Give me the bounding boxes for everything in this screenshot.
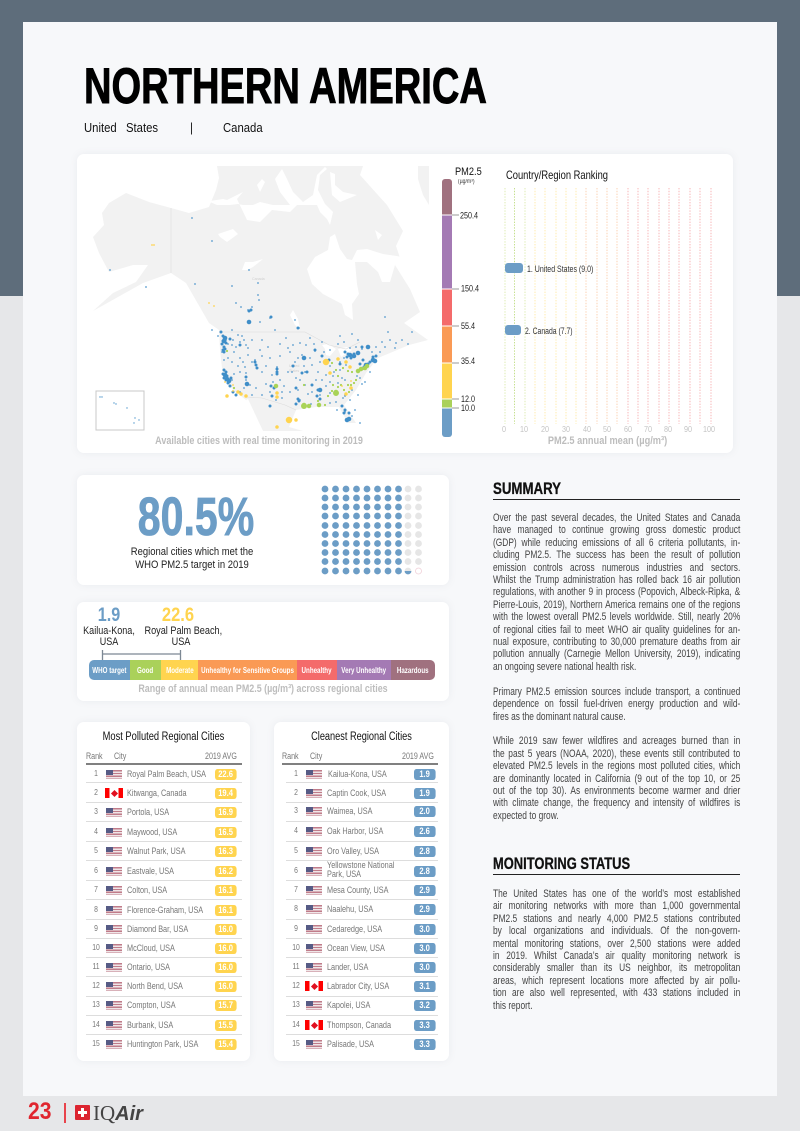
text: Walnut Park, USA xyxy=(127,846,185,856)
waffle chart xyxy=(322,486,422,574)
footer divider xyxy=(64,1103,66,1123)
text: 13 xyxy=(292,1000,300,1009)
axis labels: 20 xyxy=(541,424,549,434)
text: 7 xyxy=(94,885,98,894)
text: 16.3 xyxy=(218,846,233,857)
text: Palisade, USA xyxy=(327,1039,374,1049)
text: Ocean View, USA xyxy=(327,943,385,953)
text: Kailua-Kona, USA xyxy=(328,769,387,779)
text: 14 xyxy=(92,1020,100,1029)
text: summary: an ongoing severe national health risk. xyxy=(493,661,636,673)
map labels: United xyxy=(289,364,299,368)
text: 3.0 xyxy=(419,962,430,973)
axis labels xyxy=(502,424,715,434)
legend: PM2.5 scale: 55.4 xyxy=(461,321,475,331)
title: NORTHERN AMERICA xyxy=(84,58,487,114)
text: 8 xyxy=(294,904,298,913)
text: summary xyxy=(493,512,740,822)
text: 2 xyxy=(294,788,298,797)
chart: country ranking xyxy=(502,188,715,434)
text: Rank xyxy=(282,751,299,761)
min city xyxy=(83,625,135,648)
text: Lander, USA xyxy=(327,962,368,972)
text: summary: Over the past several decades, the United States and Canada xyxy=(493,512,740,524)
text: 1 xyxy=(94,769,98,778)
text: 16.0 xyxy=(218,924,233,935)
text: 11 xyxy=(292,962,300,971)
axis labels: 30 xyxy=(562,424,570,434)
text: monitoring status: by local organizations and individuals. Of the non-govern- xyxy=(493,925,740,937)
text: summary: pollution annually (Carnegie Mellon University, 2019), indicating xyxy=(493,648,740,660)
text: Ontario, USA xyxy=(127,962,170,972)
text: 10 xyxy=(92,943,100,952)
legend: PM2.5 scale: 150.4 xyxy=(461,284,479,294)
text: 16.1 xyxy=(218,885,233,896)
text: summary: cluding PM2.5. The success has been the result of pollution xyxy=(493,549,740,561)
text: 3.0 xyxy=(419,924,430,935)
text: 16.2 xyxy=(218,866,233,877)
text: 13 xyxy=(92,1000,100,1009)
text: monitoring status: PM2.5 stations and nearly 4,000 PM2.5 stations contributed xyxy=(493,913,740,925)
text: Compton, USA xyxy=(127,1000,176,1010)
page number: 23 xyxy=(28,1098,51,1125)
text: summary: While 2019 saw fewer wildfires and acreages burned than in xyxy=(493,735,740,747)
text: 1 xyxy=(294,769,298,778)
text: Waimea, USA xyxy=(327,806,373,816)
heading: summary: SUMMARY xyxy=(493,479,561,498)
text: City xyxy=(310,751,322,761)
text: North Bend, USA xyxy=(127,981,183,991)
text: 3.0 xyxy=(419,943,430,954)
text: 1.9 xyxy=(419,788,430,799)
text: monitoring status: areas, which represent locations more affected by air pollu- xyxy=(493,975,740,987)
text: Yellowstone National xyxy=(327,860,394,870)
text: monitoring status xyxy=(493,888,740,1012)
text: monitoring status: The United States has one of the world’s most established xyxy=(493,888,740,900)
text: 2.9 xyxy=(419,904,430,915)
text: summary: have managed to continue growing gross domestic product xyxy=(493,524,740,536)
top band xyxy=(0,0,800,296)
text: summary: the past 5 years (NOAA, 2020), these events still contributed to xyxy=(493,748,740,760)
text: 8 xyxy=(94,905,98,914)
text: monitoring status: air monitoring networks with more than 1,000 governmental xyxy=(493,900,740,912)
text: 15 xyxy=(92,1039,100,1048)
heading: summary xyxy=(493,479,740,500)
AQI scale bar: Hazardous xyxy=(397,665,429,675)
text: 2.0 xyxy=(419,806,430,817)
text: 2.8 xyxy=(419,866,430,877)
text: 15.5 xyxy=(218,1020,233,1031)
legend: PM2.5 scale: 35.4 xyxy=(461,356,475,366)
text: Oak Harbor, USA xyxy=(327,826,383,836)
text: summary: regulations, with another 9 in process (Popovich, Albeck-Ripka, & xyxy=(493,586,740,598)
text: Royal Palm Beach, USA xyxy=(127,769,206,779)
legend: PM2.5 scale: 250.4 xyxy=(460,210,478,220)
text: Eastvale, USA xyxy=(127,866,174,876)
text: summary: dependence on fossil fuel-driven energy production and wild- xyxy=(493,698,740,710)
panel: map and ranking xyxy=(77,154,733,453)
text: Cleanest Regional Cities xyxy=(311,731,412,743)
legend: PM2.5 scale xyxy=(442,166,482,437)
AQI scale bar: WHO target xyxy=(92,665,127,675)
text: 3.3 xyxy=(419,1020,430,1031)
text: 2 xyxy=(94,788,98,797)
inset: Hawaii xyxy=(96,391,144,430)
text: 11 xyxy=(92,962,100,971)
axis labels: 90 xyxy=(684,424,692,434)
heading: monitoring status: MONITORING STATUS xyxy=(493,854,630,873)
text: 16.0 xyxy=(218,981,233,992)
text: 22.6 xyxy=(218,769,233,780)
text: 5 xyxy=(94,846,98,855)
text: 9 xyxy=(94,924,98,933)
axis labels: 10 xyxy=(520,424,528,434)
text: Diamond Bar, USA xyxy=(127,924,188,934)
text: summary: Pierre-Louis, 2019), Northern America remains one of the regions xyxy=(493,599,740,611)
text: McCloud, USA xyxy=(127,943,175,953)
text: 6 xyxy=(94,866,98,875)
text: 2019 AVG xyxy=(205,751,237,761)
big percentage: 80.5% xyxy=(138,487,254,547)
legend: PM2.5 scale: PM2.5 xyxy=(455,166,482,178)
heading: monitoring status xyxy=(493,854,740,875)
panel: cleanest cities xyxy=(274,722,449,1061)
text: 2.6 xyxy=(419,826,430,837)
text: 3.2 xyxy=(419,1000,430,1011)
axis labels: 60 xyxy=(624,424,632,434)
text: 3 xyxy=(294,806,298,815)
axis title: PM2.5 annual mean (µg/m³) xyxy=(548,435,667,447)
text: 16.0 xyxy=(218,943,233,954)
text: 12 xyxy=(92,981,100,990)
text: summary: emission controls across numerous industries and sectors. xyxy=(493,562,740,574)
min city: Kailua-Kona, xyxy=(83,625,135,637)
axis labels: 80 xyxy=(664,424,672,434)
axis labels: 50 xyxy=(603,424,611,434)
bar label: United States: 1. United States (9.0) xyxy=(527,264,593,274)
axis labels: 100 xyxy=(703,424,715,434)
map labels xyxy=(252,277,299,373)
text: summary: Whilst the Trump administration has rolled back 16 air pollution xyxy=(493,574,740,586)
AQI scale bar: Unhealthy xyxy=(302,665,332,675)
text: 19.4 xyxy=(218,788,233,799)
text: 3.3 xyxy=(419,1039,430,1050)
text: monitoring status: considerably smaller than its US neighbor, its metropolitan xyxy=(493,962,740,974)
logo: IQAir: IQAir xyxy=(93,1101,143,1125)
icon: swiss cross xyxy=(75,1105,90,1120)
country list: | xyxy=(190,120,193,135)
country list: United xyxy=(84,120,117,135)
text: 14 xyxy=(292,1020,300,1029)
country list: States xyxy=(126,120,158,135)
text: Captin Cook, USA xyxy=(327,788,386,798)
axis labels: 40 xyxy=(583,424,591,434)
panel: WHO target share xyxy=(77,475,449,585)
map caption: Available cities with real time monitoring in 2019 xyxy=(155,435,363,447)
text: 9 xyxy=(294,924,298,933)
AQI scale bar: Unhealthy for Sensitive Groups xyxy=(201,665,294,675)
text: Florence-Graham, USA xyxy=(127,905,203,915)
text: 2019 AVG xyxy=(402,751,434,761)
text: Kitwanga, Canada xyxy=(127,788,187,798)
max value: 22.6 xyxy=(162,605,194,626)
text: summary: with climate change, the frequency and intensity of wildfires is xyxy=(493,797,740,809)
min value: 1.9 xyxy=(98,605,120,626)
text: summary: elevated PM2.5 levels in the regions most polluted cities, which xyxy=(493,760,740,772)
max city: USA xyxy=(172,636,190,648)
text: monitoring status: in 2019. Whilst Canada’s air quality monitoring network is xyxy=(493,950,740,962)
map labels: States xyxy=(289,369,299,373)
text: Labrador City, USA xyxy=(327,981,389,991)
table: most polluted cities xyxy=(86,731,242,1050)
text: 1.9 xyxy=(419,769,430,780)
description xyxy=(131,546,253,571)
text: 16.1 xyxy=(218,905,233,916)
text: monitoring status: this report. xyxy=(493,1000,533,1012)
text: Mesa County, USA xyxy=(327,885,388,895)
text: Cedaredge, USA xyxy=(327,924,382,934)
text: 7 xyxy=(294,885,298,894)
text: summary: of regional cities fail to meet WHO air quality guidelines for an- xyxy=(493,624,740,636)
text: summary: fires as the dominant natural cause. xyxy=(493,710,626,722)
text: summary: (GDP) while reducing emissions of all 6 criteria pollutants, in- xyxy=(493,537,740,549)
text: summary: expected to grow. xyxy=(493,810,559,822)
map dots xyxy=(110,218,412,427)
text: Park, USA xyxy=(327,868,361,878)
country list xyxy=(84,120,263,135)
panel: most polluted cities xyxy=(77,722,250,1061)
text: 16.5 xyxy=(218,827,233,838)
text: 15 xyxy=(292,1039,300,1048)
text: 15.7 xyxy=(218,1000,233,1011)
text: Colton, USA xyxy=(127,885,167,895)
text: 12 xyxy=(292,981,300,990)
text: 6 xyxy=(294,866,298,875)
AQI scale bar: Very Unhealthy xyxy=(342,665,386,675)
legend: PM2.5 scale: 12.0 xyxy=(461,394,475,404)
max city xyxy=(144,625,222,648)
map labels: Canada xyxy=(252,277,265,281)
text: Rank xyxy=(86,751,103,761)
table: cleanest cities xyxy=(282,731,438,1050)
text: Oro Valley, USA xyxy=(327,846,379,856)
text: monitoring status: mental monitoring stations, over 2,500 stations were added xyxy=(493,938,740,950)
text: 4 xyxy=(94,827,98,836)
bar: Canada xyxy=(505,325,521,335)
text: Portola, USA xyxy=(127,807,169,817)
text: 10 xyxy=(292,943,300,952)
text: Thompson, Canada xyxy=(327,1020,391,1030)
text: City xyxy=(114,751,126,761)
panel: PM2.5 range xyxy=(77,602,449,701)
text: Maywood, USA xyxy=(127,827,177,837)
text: 4 xyxy=(294,826,298,835)
axis labels: 0 xyxy=(502,424,506,434)
AQI scale bar: Good xyxy=(137,665,154,675)
text: Burbank, USA xyxy=(127,1020,173,1030)
text: 5 xyxy=(294,846,298,855)
text: Naalehu, USA xyxy=(327,904,373,914)
map: available cities xyxy=(93,166,429,431)
text: summary: out of the top 30). As environments become warmer and drier xyxy=(493,785,740,797)
description: WHO PM2.5 target in 2019 xyxy=(135,559,249,571)
min city: USA xyxy=(100,636,118,648)
text: 2.9 xyxy=(419,885,430,896)
text: Huntington Park, USA xyxy=(127,1039,198,1049)
legend: PM2.5 scale: 10.0 xyxy=(461,403,475,413)
text: 16.9 xyxy=(218,807,233,818)
text: Kapolei, USA xyxy=(327,1000,370,1010)
text: monitoring status: tion are also well represented, with 433 stations included in xyxy=(493,987,740,999)
text: 16.0 xyxy=(218,962,233,973)
text: summary: Primary PM2.5 emission sources include transport, a continued xyxy=(493,686,740,698)
legend: PM2.5 scale: (µg/m³) xyxy=(458,179,475,185)
text: summary: with the lowest overall PM2.5 levels worldwide. Still, nearly 20% xyxy=(493,611,740,623)
text: summary: are dominantly located in California (9 out of the top 10, or 25 xyxy=(493,773,740,785)
text: 15.4 xyxy=(218,1039,233,1050)
text: 3.1 xyxy=(419,981,430,992)
description: Regional cities which met the xyxy=(131,546,253,558)
range caption: Range of annual mean PM2.5 (µg/m³) across regional cities xyxy=(138,683,388,695)
text: Most Polluted Regional Cities xyxy=(103,731,224,743)
bar: United States xyxy=(505,263,523,273)
max city: Royal Palm Beach, xyxy=(144,625,222,637)
heading: ranking: Country/Region Ranking xyxy=(506,168,608,182)
axis labels: 70 xyxy=(644,424,652,434)
text: summary: nual exposure, contributing to 30,000 premature deaths from air xyxy=(493,636,740,648)
bar label: Canada: 2. Canada (7.7) xyxy=(525,326,573,336)
text: 2.8 xyxy=(419,846,430,857)
country list: Canada xyxy=(223,120,263,135)
AQI scale bar: Moderate xyxy=(166,665,193,675)
range bracket xyxy=(102,650,182,660)
text: 3 xyxy=(94,807,98,816)
AQI scale bar xyxy=(89,660,435,680)
